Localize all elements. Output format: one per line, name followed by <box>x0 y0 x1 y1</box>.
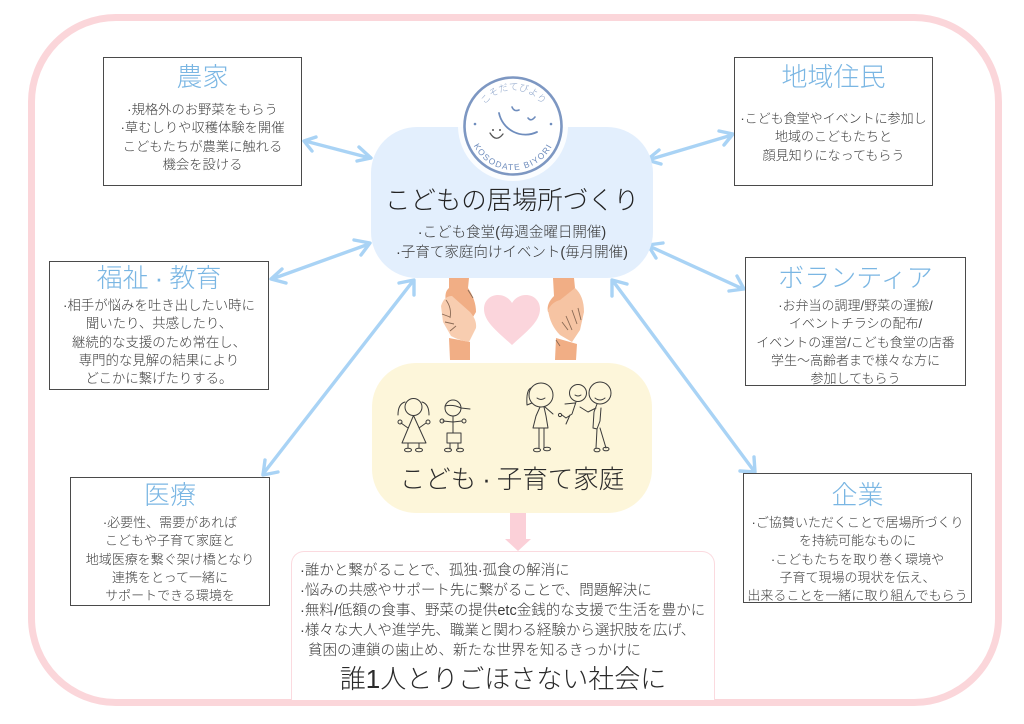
text: farmers: 機会を設ける <box>163 157 242 172</box>
text: companies: 子育て現場の現状を伝え、 <box>779 570 936 585</box>
arrow: welfare and education <box>271 240 370 283</box>
heading: welfare and education: 福祉·教育 <box>97 263 221 293</box>
text: welfare and education: どこかに繋げたりする。 <box>86 371 232 386</box>
text: outcome list: ·様々な大人や進学先、職業と関わる経験から選択肢を広げ、 <box>300 623 695 639</box>
panel: medical <box>70 477 270 606</box>
icon: girl <box>398 398 430 452</box>
text: farmers: こどもたちが農業に触れる <box>123 139 282 154</box>
text: local residents: 地域のこどもたちと <box>775 129 892 144</box>
arrow: farmers <box>304 137 371 161</box>
icon: father holding baby <box>558 382 611 452</box>
panel: volunteers <box>745 257 966 386</box>
text: volunteers <box>756 298 955 386</box>
text: outcome list: 貧困の連鎖の歯止め、新たな世界を知るきっかけに <box>308 643 641 659</box>
text: medical: 連携をとって一緒に <box>112 570 228 585</box>
logo: Kosodate Biyori: KOSODATE BIYORI <box>474 143 552 170</box>
text: centre activities: ·子育て家庭向けイベント(毎月開催) <box>396 244 628 260</box>
icon: mother <box>527 383 553 452</box>
text: local residents: ·こども食堂やイベントに参加し <box>740 111 927 126</box>
text: volunteers: イベントチラシの配布/ <box>789 316 922 331</box>
text: outcome list: ·悩みの共感やサポート先に繋がることで、問題解決に <box>300 583 652 599</box>
text: centre activities <box>396 224 628 260</box>
text: centre activities: ·こども食堂(毎週金曜日開催) <box>418 225 606 241</box>
arrow: local residents <box>647 131 733 164</box>
heading: children and child-rearing families: こども·子育て家庭 <box>400 466 624 494</box>
arrow: volunteers <box>648 243 744 291</box>
panel: farmers <box>103 57 302 186</box>
text: companies: 出来ることを一緒に取り組んでもらう <box>747 588 968 603</box>
arrow: medical <box>263 280 414 475</box>
heading: companies: 企業 <box>831 480 884 510</box>
text: farmers: ·規格外のお野菜をもらう <box>127 102 278 117</box>
text: welfare and education <box>63 298 255 386</box>
text: medical <box>86 515 254 603</box>
text: volunteers: イベントの運営/こども食堂の店番 <box>756 335 955 350</box>
heading: place for children: こどもの居場所づくり <box>385 187 639 215</box>
text: companies <box>747 515 968 603</box>
panel: outcomes <box>291 551 715 700</box>
text: medical: こどもや子育て家庭と <box>105 533 235 548</box>
text: companies: を持続可能なものに <box>799 533 916 548</box>
heading: volunteers: ボランティア <box>778 263 933 293</box>
text: farmers: ·草むしりや収穫体験を開催 <box>120 120 284 135</box>
icon: heart <box>484 295 540 345</box>
text: medical: ·必要性、需要があれば <box>103 515 237 530</box>
text: volunteers: 学生〜高齢者まで様々な方に <box>771 353 940 368</box>
panel: companies <box>743 473 972 603</box>
text: volunteers: ·お弁当の調理/野菜の運搬/ <box>778 298 933 313</box>
text: welfare and education: 聞いたり、共感したり、 <box>86 316 232 331</box>
text: medical: 地域医療を繋ぐ架け橋となり <box>86 552 254 567</box>
panel: welfare and education <box>49 261 269 390</box>
panel: centre - place for children <box>371 127 653 278</box>
text: local residents: 顔見知りになってもらう <box>763 148 904 163</box>
text: outcome list: ·無料/低額の食事、野菜の提供etc金銭的な支援で生活を豊かに <box>300 603 705 619</box>
panel: local residents <box>734 57 933 186</box>
text: welfare and education: ·相手が悩みを吐き出したい時に <box>63 298 255 313</box>
logo: Kosodate Biyori: こそだてびより <box>482 83 545 102</box>
text: farmers <box>120 102 284 172</box>
text: outcome list: ·誰かと繋がることで、孤独·孤食の解消に <box>300 563 570 579</box>
arrow: companies <box>612 280 755 472</box>
text: local residents <box>740 111 927 163</box>
text: companies: ·こどもたちを取り巻く環境や <box>771 552 944 567</box>
heading: a society that leaves no one behind: 誰1人とりごほさない社会に <box>340 664 666 694</box>
text: outcome list <box>300 562 705 659</box>
text: welfare and education: 専門的な見解の結果により <box>79 353 239 368</box>
text: welfare and education: 継続的な支援のため常在し、 <box>72 335 246 350</box>
text: medical: サポートできる環境を <box>105 588 235 603</box>
heading: medical: 医療 <box>144 480 196 510</box>
heading: farmers: 農家 <box>176 62 228 92</box>
text: companies: ·ご協賛いただくことで居場所づくり <box>752 515 963 530</box>
icon: boy <box>440 400 470 452</box>
text: volunteers: 参加してもらう <box>811 371 900 386</box>
heading: local residents: 地域住民 <box>781 62 886 92</box>
panel: children and families <box>372 363 652 513</box>
